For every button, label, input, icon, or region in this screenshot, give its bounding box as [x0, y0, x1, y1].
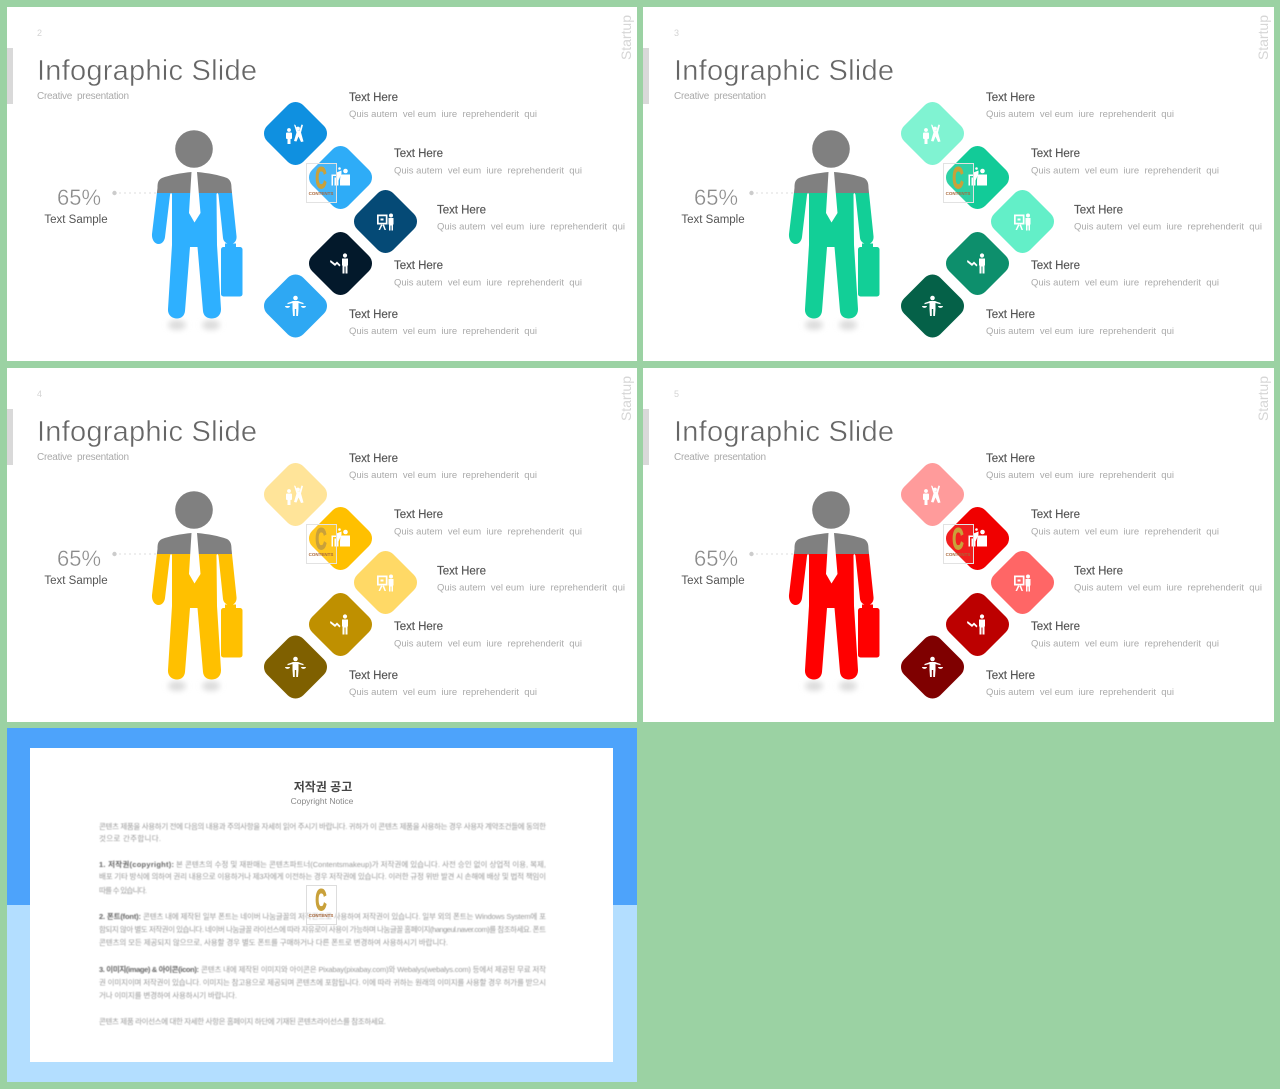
notice body [99, 821, 546, 1026]
item 3 text [437, 204, 625, 232]
item 4 text [1031, 260, 1219, 288]
item 5 text: Quis autem vel eum iure reprehenderit qui [349, 687, 537, 698]
item 3 text [437, 566, 625, 594]
item 3 text [1074, 566, 1262, 594]
item 3 text: Text Here [1074, 566, 1123, 578]
item 1 text [986, 453, 1174, 481]
watermark: CONTENTS [946, 191, 970, 196]
item 2 text: Quis autem vel eum iure reprehenderit qui [1031, 166, 1219, 176]
item 3 text [1074, 204, 1262, 232]
stat: 65% [681, 185, 745, 226]
stat: 65% [681, 546, 745, 587]
diamond 5 [896, 270, 969, 342]
diamond 4 [941, 588, 1014, 661]
subtitle: Creative presentation [37, 91, 129, 102]
item 2 text [394, 148, 582, 176]
item 5 text: Quis autem vel eum iure reprehenderit qui [349, 326, 537, 337]
diamond 2 [304, 502, 377, 575]
page number: 3 [674, 28, 679, 38]
item 5 text [349, 670, 537, 698]
stat: 65%: 65% [694, 185, 738, 210]
stat: 65%: Text Sample [44, 214, 108, 226]
diamond 3 [986, 546, 1059, 619]
item 5 text [986, 670, 1174, 698]
item 5 text: Quis autem vel eum iure reprehenderit qui [986, 687, 1174, 698]
item 1 text: Quis autem vel eum iure reprehenderit qui [349, 109, 537, 120]
item 5 text: Text Here [986, 309, 1035, 321]
diamond 3 [986, 185, 1059, 258]
diamond 4 [304, 588, 377, 661]
item 1 text: Quis autem vel eum iure reprehenderit qui [349, 470, 537, 481]
watermark: C [952, 162, 964, 196]
side tab [7, 48, 13, 104]
item 1 text: Quis autem vel eum iure reprehenderit qui [986, 470, 1174, 481]
stat: 65%: Text Sample [44, 575, 108, 587]
diamond 3 [349, 546, 422, 619]
diamond 1 [259, 458, 332, 531]
title: Infographic Slide [37, 55, 257, 87]
watermark: CONTENTS [309, 191, 333, 196]
item 4 text: Text Here [1031, 621, 1080, 633]
page number: 2 [37, 28, 42, 38]
figure: businessman [789, 130, 880, 330]
watermark: CONTENTS [946, 552, 970, 557]
watermark: C [952, 523, 964, 557]
item 5 text: Quis autem vel eum iure reprehenderit qui [986, 326, 1174, 337]
item 4 text: Text Here [394, 621, 443, 633]
diamond 2 [304, 141, 377, 214]
item 1 text: Text Here [986, 92, 1035, 104]
notice body: 콘텐츠 제품을 사용하기 전에 다음의 내용과 주의사항을 자세히 읽어 주시기 바랍니다. 귀하가 이 콘텐츠 제품을 사용하는 경우 사용자 계약조건들에 동의한 [99, 821, 546, 831]
watermark: C [315, 884, 327, 918]
notice body: 따를 수 있습니다. [99, 886, 147, 895]
stat: 65% [44, 185, 108, 226]
item 4 text [394, 260, 582, 288]
watermark: C [315, 523, 327, 557]
title: Infographic Slide [674, 55, 894, 87]
item 1 text: Text Here [986, 453, 1035, 465]
stat: 65%: 65% [694, 546, 738, 571]
vertical label: Startup [618, 376, 634, 421]
stat: 65%: 65% [57, 546, 101, 571]
panel: blue slide [7, 7, 637, 361]
item 2 text [394, 509, 582, 538]
notice body: 권 이미지이며 저작권이 있습니다. 이미지는 참고용으로 제공되며 콘텐츠에 포함됩니다. 이에 따라 귀하는 원래의 이미지를 사용할 경우 허가를 받으시 [99, 977, 546, 987]
side tab [7, 409, 13, 465]
notice body: 본 콘텐츠의 수정 및 재판매는 콘텐츠파트너(Contentsmakeup)가 저작권에 있습니다. 사전 승인 없이 상업적 이용, 복제, [176, 859, 546, 869]
vertical label: Startup [1255, 376, 1271, 421]
watermark: CONTENTS [309, 552, 333, 557]
stat: 65%: 65% [57, 185, 101, 210]
diamond 4 [304, 227, 377, 300]
notice body: 3. 이미지(image) & 아이콘(icon): [99, 964, 199, 974]
panel: green slide [643, 7, 1274, 361]
item 3 text: Text Here [437, 204, 486, 216]
notice body: 1. 저작권(copyright): [99, 859, 174, 869]
vertical label: Startup [618, 15, 634, 60]
item 1 text: Text Here [349, 92, 398, 104]
item 2 text: Text Here [1031, 509, 1080, 521]
item 5 text [349, 309, 537, 337]
page number: 4 [37, 389, 42, 399]
diamond 2 [941, 502, 1014, 575]
item 4 text: Quis autem vel eum iure reprehenderit qui [1031, 638, 1219, 650]
notice body: 콘텐츠의 모든 제공되지 않으므로, 사용할 경우 별도 폰트를 구매하거나 다른 폰트로 변경하여 사용하시기 바랍니다. [99, 937, 448, 947]
subtitle: Creative presentation [674, 452, 766, 463]
panel: red slide [643, 368, 1274, 722]
item 2 text: Quis autem vel eum iure reprehenderit qui [394, 166, 582, 176]
diamond 3 [349, 185, 422, 258]
figure: businessman [152, 130, 242, 330]
item 2 text [1031, 148, 1219, 176]
watermark [306, 162, 336, 202]
stat: 65%: Text Sample [681, 575, 745, 587]
diamond 5 [259, 270, 332, 342]
watermark [306, 884, 336, 924]
diamond 1 [896, 458, 969, 531]
item 4 text: Text Here [1031, 260, 1080, 272]
notice body: 콘텐츠 내에 제작된 일부 폰트는 네이버 나눔글꼴의 저작권으로 사용하여 저작권이 있습니다. 일부 외의 폰트는 Windows System에 포 [143, 911, 546, 921]
notice body: 2. 폰트(font): [99, 912, 141, 921]
item 2 text: Quis autem vel eum iure reprehenderit qui [394, 526, 582, 538]
item 3 text: Text Here [437, 566, 486, 578]
vertical label: Startup [1255, 15, 1271, 60]
notice body: 콘텐츠 제품 라이선스에 대한 자세한 사항은 홈페이지 하단에 기재된 콘텐츠라이선스를 참조하세요. [99, 1016, 386, 1026]
diamond 1 [259, 97, 332, 170]
notice subheading: Copyright Notice [291, 796, 354, 806]
leader line [749, 191, 808, 195]
page number: 5 [674, 389, 679, 399]
leader line [112, 191, 171, 195]
item 3 text: Quis autem vel eum iure reprehenderit qui [437, 222, 625, 232]
leader line [112, 552, 171, 556]
watermark [944, 523, 974, 564]
item 2 text: Text Here [394, 148, 443, 160]
item 2 text [1031, 509, 1219, 538]
diamond 5 [259, 631, 332, 703]
notice body: 것으로 간주합니다. [99, 833, 161, 843]
item 5 text: Text Here [349, 670, 398, 682]
item 5 text: Text Here [349, 309, 398, 321]
item 4 text [394, 621, 582, 650]
watermark: CONTENTS [309, 913, 333, 918]
watermark [944, 162, 974, 202]
diamond 4 [941, 227, 1014, 300]
item 3 text: Quis autem vel eum iure reprehenderit qui [1074, 582, 1262, 594]
figure: businessman [152, 491, 242, 691]
watermark: C [315, 162, 327, 196]
item 3 text: Quis autem vel eum iure reprehenderit qui [1074, 222, 1262, 232]
item 1 text [349, 92, 537, 120]
item 1 text: Text Here [349, 453, 398, 465]
diamond 2 [941, 141, 1014, 214]
stat: 65%: Text Sample [681, 214, 745, 226]
side tab [643, 409, 649, 465]
subtitle: Creative presentation [674, 91, 766, 102]
item 1 text: Quis autem vel eum iure reprehenderit qui [986, 109, 1174, 120]
item 2 text: Quis autem vel eum iure reprehenderit qui [1031, 526, 1219, 538]
side tab [643, 48, 649, 104]
notice body: 함되지 않아 별도 저작권이 있습니다. 네이버 나눔글꼴 라이선스에 따라 자유로이 사용이 가능하며 나눔글꼴 홈페이지(hangeul.naver.com)를 참조하세요. 폰트 [99, 924, 546, 934]
subtitle: Creative presentation [37, 452, 129, 463]
item 3 text: Text Here [1074, 204, 1123, 216]
watermark [306, 523, 336, 564]
stat: 65% [44, 546, 108, 587]
item 4 text: Text Here [394, 260, 443, 272]
notice body: 거나 이미지를 변경하여 사용하시기 바랍니다. [99, 990, 237, 1000]
item 1 text [986, 92, 1174, 120]
notice body: 배포 기타 방식에 의하여 권리 내용으로 이용하거나 제3자에게 이전하는 경우 저작권에 있습니다. 이러한 규정 위반 발견 시 손해에 배상 및 법적 책임이 [99, 871, 546, 881]
item 4 text: Quis autem vel eum iure reprehenderit qui [1031, 278, 1219, 288]
item 5 text [986, 309, 1174, 337]
title: Infographic Slide [37, 416, 257, 448]
diamond 5 [896, 631, 969, 703]
diamond 1 [896, 97, 969, 170]
panel: yellow slide [7, 368, 637, 722]
notice heading: 저작권 공고 [294, 779, 352, 794]
item 4 text: Quis autem vel eum iure reprehenderit qui [394, 278, 582, 288]
item 3 text: Quis autem vel eum iure reprehenderit qui [437, 582, 625, 594]
title: Infographic Slide [674, 416, 894, 448]
item 2 text: Text Here [394, 509, 443, 521]
panel: copyright notice [7, 728, 637, 1082]
notice body: 콘텐츠 내에 제작된 이미지와 아이콘은 Pixabay(pixabay.com)와 Webalys(webalys.com) 등에서 제공된 무료 저작 [201, 964, 546, 974]
item 4 text: Quis autem vel eum iure reprehenderit qui [394, 638, 582, 650]
item 5 text: Text Here [986, 670, 1035, 682]
figure: businessman [789, 491, 880, 691]
item 4 text [1031, 621, 1219, 650]
item 2 text: Text Here [1031, 148, 1080, 160]
leader line [749, 552, 808, 556]
item 1 text [349, 453, 537, 481]
